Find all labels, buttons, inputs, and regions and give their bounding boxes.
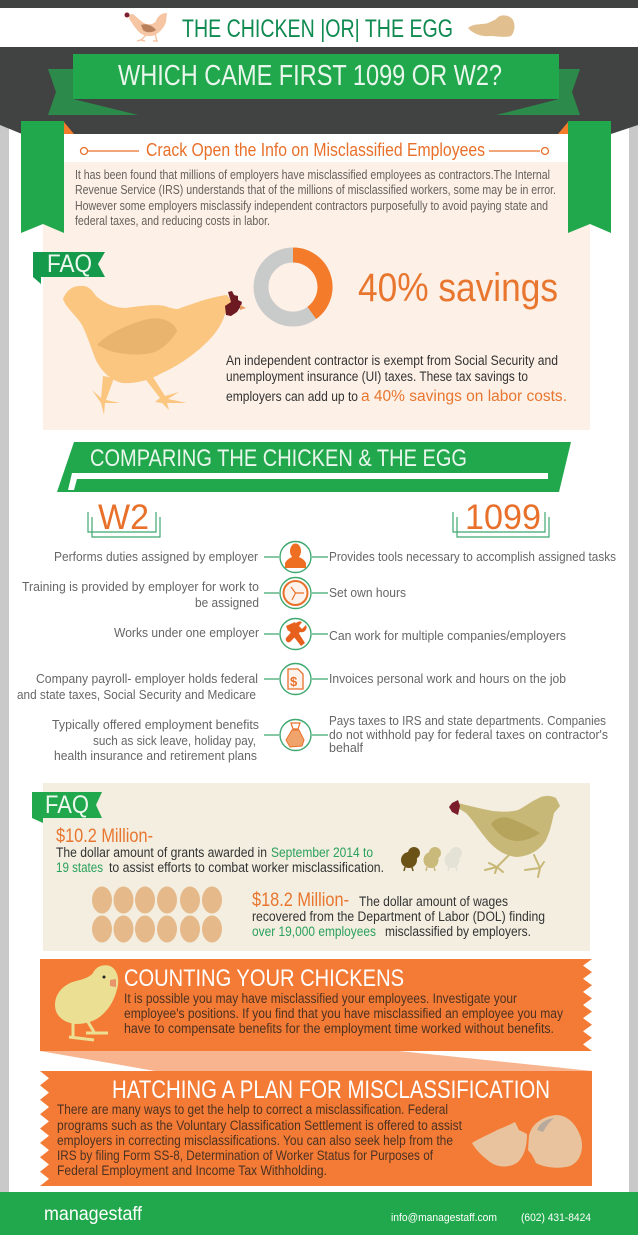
eggs: 12 pictogram xyxy=(92,886,222,942)
counting text xyxy=(124,991,563,1036)
banner heading: WHICH CAME FIRST 1099 OR W2? xyxy=(118,60,502,92)
stat: 10.2 million xyxy=(56,826,384,875)
icon: invoice: $ xyxy=(290,674,298,689)
icon: person xyxy=(264,542,328,572)
header: chicken icon xyxy=(124,12,167,41)
stat: 18.2 million: The dollar amount of wages xyxy=(359,894,508,909)
counting text: have to compensate benefits for the employment time worked without benefits. xyxy=(124,1021,554,1036)
hatching text: Federal Employment and Income Tax Withholding. xyxy=(57,1163,327,1178)
hatching text: programs such as the Voluntary Classification Settlement is offered to assist xyxy=(57,1118,462,1133)
stat: 10.2 million: 19 states xyxy=(56,860,103,875)
donut chart: 40 percent xyxy=(261,255,325,319)
icon: clock xyxy=(264,578,328,608)
orange ribbon folds xyxy=(64,122,568,134)
hatching heading: HATCHING A PLAN FOR MISCLASSIFICATION xyxy=(112,1076,550,1104)
savings text xyxy=(226,353,567,405)
footer logo: managestaff xyxy=(44,1204,143,1225)
stat: 18.2 million: misclassified by employers. xyxy=(385,924,531,939)
footer email: info@managestaff.com xyxy=(391,1212,497,1224)
left side ribbon xyxy=(21,121,64,233)
stat: 10.2 million: $10.2 Million- xyxy=(56,826,153,847)
intro text: Revenue Service (IRS) understands that of the millions of misclassified workers, some may be in error. xyxy=(75,183,556,197)
savings text: An independent contractor is exempt from Social Security and xyxy=(226,353,558,368)
subheading: crack open: Crack Open the Info on Misclassified Employees xyxy=(146,140,485,160)
white content top xyxy=(9,134,629,164)
savings text: a 40% savings on labor costs. xyxy=(361,388,567,405)
FAQ tag 2: FAQ xyxy=(45,791,89,819)
1099 column text: Pays taxes to IRS and state departments. Companies xyxy=(329,713,606,728)
FAQ tag 1: FAQ xyxy=(47,250,92,278)
1099 column text: Can work for multiple companies/employers xyxy=(329,628,566,643)
icon: tools xyxy=(264,618,328,650)
banner: counting your chickens xyxy=(40,959,592,1051)
hatching text: IRS by filing Form SS-8, Determination of Worker Status for Purposes of xyxy=(57,1148,433,1163)
icon: money bag xyxy=(264,720,328,750)
beige FAQ panel xyxy=(43,783,590,951)
cream intro and savings panel xyxy=(43,162,590,430)
intro text: However some employers misclassify independent contractors purposefully to avoid paying state and xyxy=(75,199,548,213)
stat: 18.2 million: recovered from the Department of Labor (DOL) finding xyxy=(252,909,545,924)
1099 column text: Set own hours xyxy=(329,585,406,600)
savings text: employers can add up to xyxy=(226,389,358,404)
1099 column text: behalf xyxy=(329,740,363,755)
big stat: 40% savings: 40% savings xyxy=(358,266,558,310)
counting text: employee's positions. If you find that you have misclassified an employee you may xyxy=(124,1006,563,1021)
header title: THE CHICKEN |OR| THE EGG xyxy=(182,15,453,43)
icon: invoice xyxy=(264,664,328,694)
stat: 18.2 million xyxy=(252,890,545,939)
intro text xyxy=(75,168,556,228)
1099 column text xyxy=(329,549,616,755)
W2 column text: health insurance and retirement plans xyxy=(54,748,257,763)
hatching text: employers in correcting misclassifications. You can also seek help from the xyxy=(57,1133,453,1148)
footer bar xyxy=(0,1192,638,1235)
W2 column text: Typically offered employment benefits xyxy=(52,717,259,732)
illustration: hen and chicks xyxy=(401,796,560,877)
stat: 18.2 million: $18.2 Million- xyxy=(252,890,349,911)
dark header band xyxy=(0,47,638,134)
section banner: comparing: COMPARING THE CHICKEN & THE EGG xyxy=(90,445,467,472)
section banner: comparing xyxy=(57,442,571,492)
header: egg shell icon xyxy=(468,15,514,37)
illustration: hen xyxy=(63,286,246,415)
stat: 18.2 million: over 19,000 employees xyxy=(252,924,376,939)
stat: 10.2 million: September 2014 to xyxy=(271,845,373,860)
W2 column text: and state taxes, Social Security and Medicare xyxy=(17,687,256,702)
counting heading: COUNTING YOUR CHICKENS xyxy=(124,965,404,992)
1099 column text: do not withhold pay for federal taxes on contractor's xyxy=(329,727,608,742)
hatching text xyxy=(57,1102,462,1178)
W2 column text xyxy=(17,549,260,763)
W2 column text: Training is provided by employer for work to xyxy=(22,579,259,594)
illustration: cracked egg xyxy=(472,1115,582,1168)
banner: hatching a plan xyxy=(40,1071,592,1186)
W2 column text: Company payroll- employer holds federal xyxy=(36,671,258,686)
hatching text: There are many ways to get the help to correct a misclassification. Federal xyxy=(57,1102,448,1117)
W2 column text: Works under one employer xyxy=(114,625,260,640)
column heading: W2: W2 xyxy=(98,498,149,537)
1099 column text: Invoices personal work and hours on the job xyxy=(329,671,566,686)
1099 column text: Provides tools necessary to accomplish assigned tasks xyxy=(329,549,616,564)
stat: 10.2 million: to assist efforts to combat worker misclassification. xyxy=(109,860,384,875)
stat: 10.2 million: The dollar amount of grants awarded in xyxy=(56,845,267,860)
W2 column text: such as sick leave, holiday pay, xyxy=(93,733,256,748)
intro text: federal taxes, and reducing costs in labor. xyxy=(75,214,270,228)
intro text: It has been found that millions of employers have misclassified employees as contractors.The Internal xyxy=(75,168,550,182)
column heading: 1099: 1099 xyxy=(465,498,541,537)
FAQ tag 1 xyxy=(33,250,105,284)
icon: chick xyxy=(55,965,118,1040)
FAQ tag 2 xyxy=(32,791,102,823)
W2 column text: Performs duties assigned by employer xyxy=(54,549,259,564)
footer phone: (602) 431-8424 xyxy=(521,1212,591,1224)
right side ribbon xyxy=(568,121,611,233)
connecting fold between banners xyxy=(40,1051,592,1071)
main banner xyxy=(48,54,580,115)
counting text: It is possible you may have misclassified your employees. Investigate your xyxy=(124,991,517,1006)
W2 column text: be assigned xyxy=(195,595,259,610)
savings text: unemployment insurance (UI) taxes. These tax savings to xyxy=(226,369,528,384)
